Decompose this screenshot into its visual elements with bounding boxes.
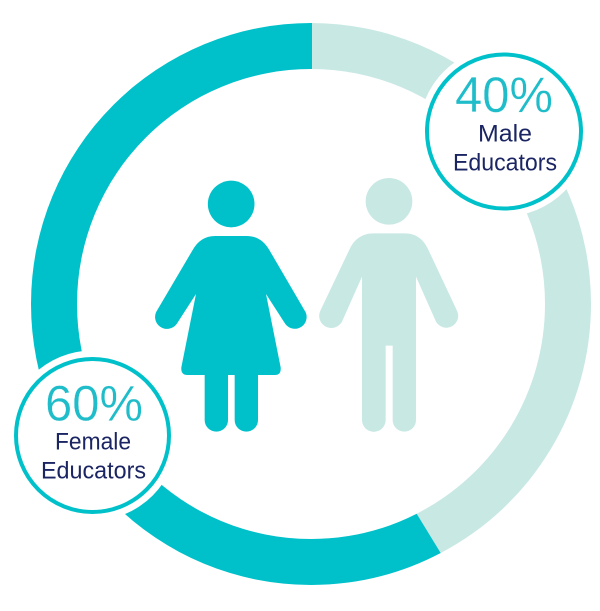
- label: male educators: [453, 121, 557, 177]
- ring segment: female 60%: [31, 23, 441, 585]
- icon: female figure: [155, 181, 307, 432]
- callout: female educators: [8, 350, 178, 520]
- icon: male figure: [319, 178, 458, 432]
- label: female educators: Educators: [41, 458, 146, 484]
- percentage: 60%: 60%: [45, 376, 143, 432]
- label: male educators: Male: [478, 121, 532, 148]
- callout: male educators: [419, 46, 589, 216]
- label: male educators: Educators: [453, 150, 557, 177]
- percentage: 40%: 40%: [455, 67, 553, 123]
- label: female educators: [41, 428, 146, 484]
- ring segment: male 40%: [311, 23, 591, 553]
- label: female educators: Female: [55, 428, 131, 456]
